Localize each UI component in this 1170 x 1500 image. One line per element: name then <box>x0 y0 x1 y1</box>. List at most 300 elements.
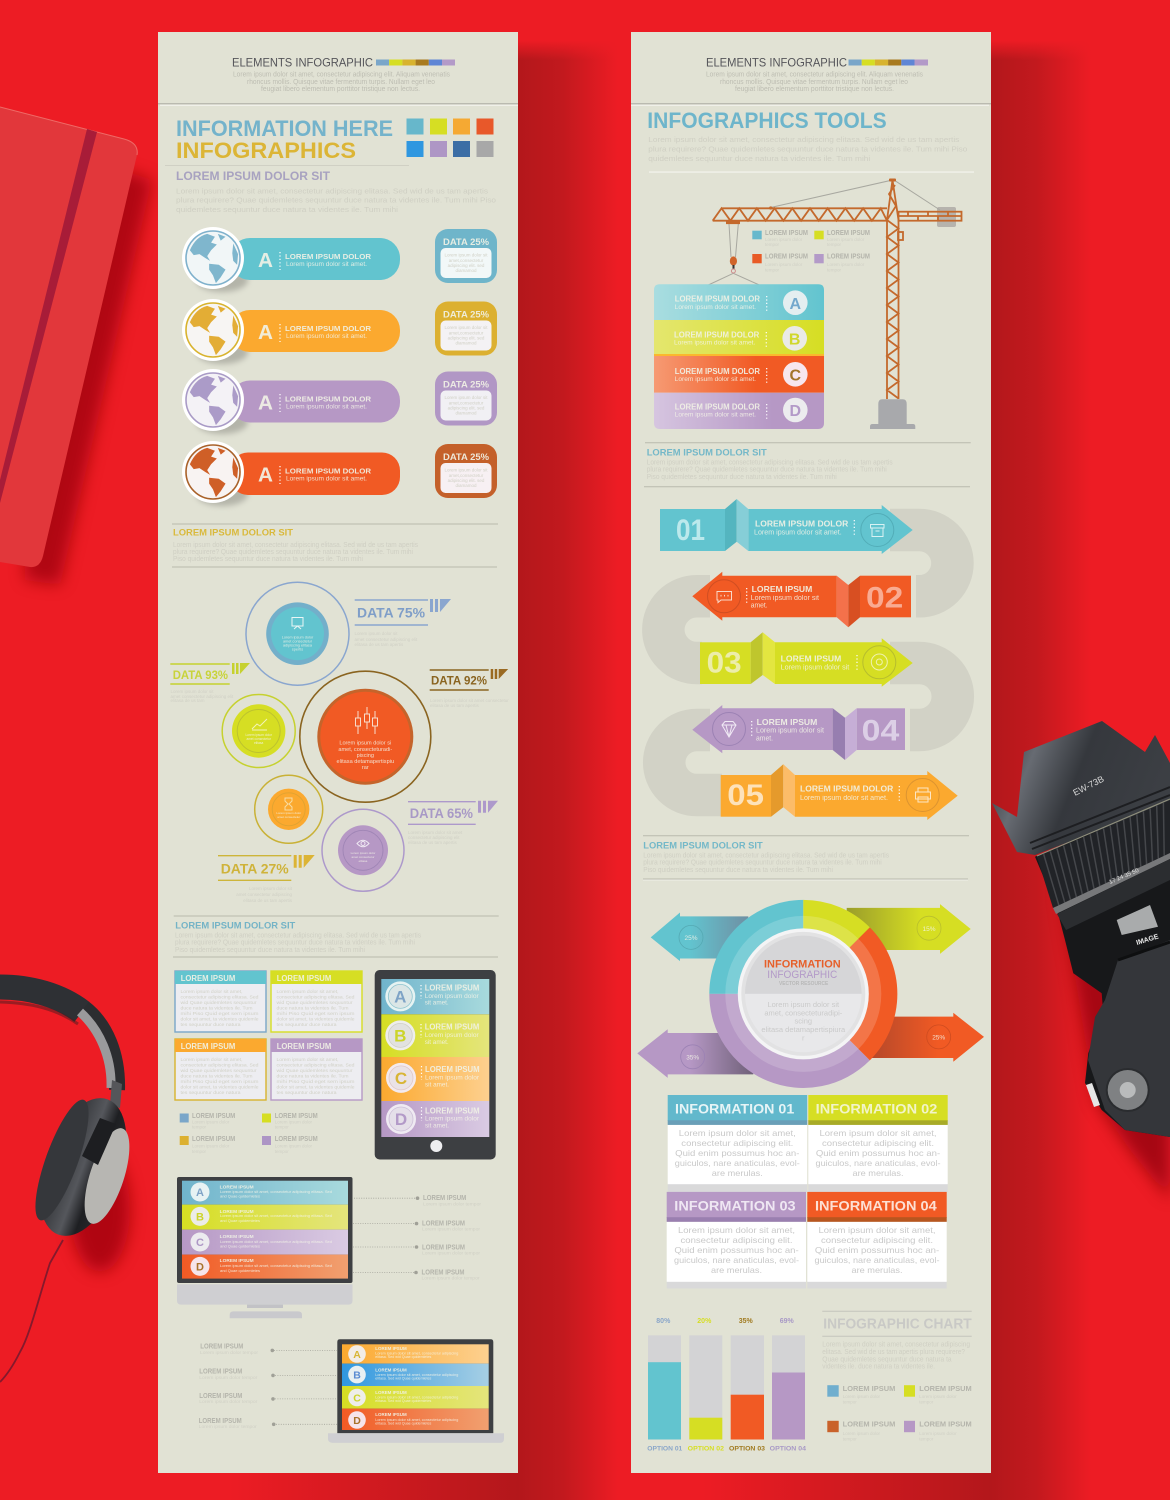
information card 04 <box>807 1192 947 1288</box>
information card 04: are merulas. <box>852 1265 902 1275</box>
row: red globe bar: LOREM IPSUM DOLOR <box>285 466 372 476</box>
crane legend: Lorem ipsum dolor <box>765 237 803 242</box>
bar chart: OPTION 04 <box>770 1446 806 1453</box>
information card 01: Quid enim possumus hoc an- <box>675 1148 800 1158</box>
arrow step 05: Lorem ipsum dolor sit amet. <box>800 795 888 802</box>
crane legend: LOREM IPSUM <box>765 230 808 237</box>
tablet row B <box>385 1020 480 1050</box>
monitor row A <box>190 1182 332 1202</box>
laptop row C: Lorem ipsum dolor sit amet, consectetur adipiscing <box>375 1396 458 1400</box>
laptop row B: Lorem ipsum dolor sit amet, consectetur adipiscing <box>375 1373 458 1377</box>
information card 02: Quid enim possumus hoc an- <box>816 1148 940 1158</box>
callout: data 93 <box>170 663 250 703</box>
stack row B <box>674 326 807 351</box>
stack row D: D <box>790 403 801 420</box>
text card purple: mihi Piso Quid eget sem ipsum <box>276 1079 355 1084</box>
desktop monitor mockup <box>177 1177 352 1318</box>
header: elements infographic: feugiat libero elementum porttitor tristique non lectus. <box>735 86 894 93</box>
laptop row D: elitasa. Sed wid Quae quidemletes <box>375 1422 431 1426</box>
row: orange globe bar: A <box>258 322 273 344</box>
row: teal globe bar: A <box>258 250 273 272</box>
bar chart: OPTION 03 <box>729 1446 765 1453</box>
bar chart: 69% <box>780 1318 794 1325</box>
monitor row C <box>190 1232 332 1252</box>
stack row D: Lorem ipsum dolor sit amet. <box>675 412 756 419</box>
right red arrow 25%: 25% <box>932 1034 945 1042</box>
hanging A-D stack <box>654 284 824 429</box>
row: teal globe bar: LOREM IPSUM DOLOR <box>285 252 372 261</box>
laptop leader labels: Lorem ipsum dolor tempor <box>199 1424 257 1429</box>
laptop row C: C <box>353 1392 361 1404</box>
stack row B: B <box>789 332 800 348</box>
callout: data 92: Lorem ipsum dolor sit amet consectetur <box>430 698 509 703</box>
tablet row D: D <box>395 1110 407 1129</box>
arrow step 02: LOREM IPSUM <box>752 584 812 594</box>
callout: data 65: DATA 65% <box>410 805 474 821</box>
text card lime: dolor sit amet, ta videntes quidemle <box>276 1016 355 1022</box>
chart text and legend: tempor <box>919 1436 934 1442</box>
callout: data 92: elitasa de us tam apertis <box>430 703 480 708</box>
callout: data 92 <box>430 669 509 708</box>
chart text and legend: tempor <box>919 1400 934 1404</box>
laptop row D <box>348 1411 458 1429</box>
bubble: lime <box>222 694 295 768</box>
arrow step 05 <box>721 764 958 820</box>
information card 02: guiculos, nare anaticulas, evol- <box>816 1158 941 1168</box>
row: purple globe bar: A <box>258 392 273 414</box>
section text: teal heading: LOREM IPSUM DOLOR SIT <box>175 921 295 932</box>
text card teal: consectetur adipiscing elitasa. Sed <box>180 994 259 1000</box>
data card orange: diamamod <box>455 340 477 346</box>
small legend: tempor <box>275 1124 289 1129</box>
information card 04: INFORMATION 04 <box>815 1197 937 1213</box>
text card orange: wid Quae quidemletes sequuntur <box>180 1068 257 1073</box>
monitor row A: A <box>196 1187 204 1199</box>
text card lime <box>271 971 362 1032</box>
section text: teal heading: plura requirere? Quae quidemletes sequuntur duce natura ta videntes ile. Tum mihi <box>175 940 415 946</box>
crane legend: Lorem ipsum dolor <box>827 237 865 242</box>
laptop leader labels: Lorem ipsum dolor tempor <box>199 1375 258 1380</box>
data card purple: diamamod <box>455 410 477 416</box>
header: elements infographic: rhoncus mollis. Quisque vitae fermentum turpis. Nullam eget leo <box>720 79 908 86</box>
title: infographics tools <box>647 108 974 173</box>
bar chart: 35% <box>739 1318 753 1325</box>
text card teal: wid Quae quidemletes sequuntur <box>180 1000 257 1005</box>
data card teal: amet,consectetur <box>449 258 484 263</box>
central ring chart: r <box>802 1033 805 1042</box>
callout: data 92: DATA 92% <box>431 673 487 687</box>
callout: data 27: DATA 27% <box>221 860 289 876</box>
data card purple: Lorem ipsum dolor sit <box>444 395 488 400</box>
data card teal: adipiscing elit. sed <box>448 263 485 268</box>
tablet row B: Lorem ipsum dolor <box>425 1032 479 1039</box>
data card orange: amet,consectetur <box>449 330 484 335</box>
small legend: LOREM IPSUM <box>192 1136 235 1143</box>
laptop row A: elitasa. Sed wid Quae quidemletes <box>375 1355 431 1359</box>
stack row C: LOREM IPSUM DOLOR <box>675 367 760 376</box>
chart text and legend: Lorem ipsum dolor <box>843 1431 880 1436</box>
callout: data 65 <box>408 801 498 845</box>
crane legend: Lorem ipsum dolor <box>827 262 865 267</box>
information card 02: are merulas. <box>852 1168 904 1178</box>
text card lime: duce natura ta videntes ile. Tum <box>276 1006 349 1010</box>
title block <box>176 116 393 163</box>
callout: data 27: amet consectetur adipiscing <box>236 892 292 897</box>
row: orange globe bar: LOREM IPSUM DOLOR <box>285 324 372 333</box>
stack row D <box>675 398 808 422</box>
bar chart: 20% <box>697 1318 712 1325</box>
left purple arrow 35%: 35% <box>686 1054 699 1061</box>
bar chart: 80% <box>656 1318 671 1325</box>
tablet row C: sit amet. <box>425 1082 449 1088</box>
laptop row B <box>348 1366 458 1383</box>
camera photo: 17 24 35 50 <box>1108 868 1141 886</box>
monitor row D: Lorem ipsum dolor sit amet, consectetur adipiscing elitasa. Sed <box>220 1264 332 1268</box>
data card teal: diamamod <box>455 268 477 273</box>
arrow step 02: Lorem ipsum dolor sit <box>751 595 819 602</box>
laptop row C: LOREM IPSUM <box>375 1390 407 1395</box>
text card lime: LOREM IPSUM <box>277 974 332 983</box>
headphones photo <box>0 987 143 1382</box>
arrow step 02 <box>692 572 911 627</box>
section text under arrows: Lorem ipsum dolor sit amet, consectetur adipiscing elitasa. Sed wid de us tam apertis <box>643 852 889 860</box>
laptop leader labels: LOREM IPSUM <box>199 1369 242 1376</box>
right lime arrow 15%: 15% <box>922 926 936 933</box>
arrow step 05: LOREM IPSUM DOLOR <box>800 784 893 794</box>
data card red: diamamod <box>455 483 477 488</box>
arrow step 03: LOREM IPSUM <box>781 654 841 664</box>
crane legend: tempor <box>827 242 842 247</box>
central ring chart <box>709 900 897 1088</box>
information card 04: guiculos, nare anaticulas, evol- <box>814 1255 940 1265</box>
small legend: Lorem ipsum dolor <box>275 1144 312 1148</box>
information card 02: INFORMATION 02 <box>816 1100 938 1116</box>
monitor leader labels: Lorem ipsum dolor tempor <box>422 1276 480 1281</box>
text card purple: dolor sit amet, ta videntes quidemle <box>276 1084 355 1090</box>
header: elements infographic: Lorem ipsum dolor sit amet, consectetur adipiscing elit. Aliquam venenatis <box>233 72 450 78</box>
information card 01: are merulas. <box>712 1168 763 1178</box>
colour swatches <box>406 118 494 157</box>
crane legend <box>752 230 870 272</box>
section text under arrows: plura requirere? Quae quidemletes sequuntur duce natura ta videntes ile. Tum mihi <box>643 860 882 866</box>
stack row C: C <box>790 367 802 384</box>
bubble: teal: spertis <box>292 648 303 652</box>
laptop row A <box>348 1345 458 1363</box>
bar chart <box>647 1318 806 1453</box>
laptop row C: elitasa. Sed wid Quae quidemletes <box>375 1399 431 1403</box>
callout: data 75 <box>354 599 451 647</box>
title block: INFORMATION HERE <box>176 116 393 141</box>
data card purple: amet,consectetur <box>449 400 484 405</box>
arrow step 03: 03 <box>707 647 742 680</box>
monitor leader labels: Lorem ipsum dolor tempor <box>422 1250 481 1255</box>
bubble: orange <box>255 775 323 843</box>
text card lime: wid Quae quidemletes sequuntur <box>276 1000 353 1005</box>
bubble: orange: Lorem ipsum dolor <box>276 811 301 815</box>
callout: data 27: Lorem ipsum dolor sit <box>249 886 293 891</box>
stack row A: Lorem ipsum dolor sit amet. <box>675 304 756 311</box>
small legend: tempor <box>192 1149 207 1154</box>
text card orange: Lorem ipsum dolor sit amet, <box>180 1057 242 1062</box>
section text under crane: plura requirere? Quae quidemletes sequuntur duce natura ta videntes ile. Tum mihi <box>647 466 887 474</box>
section text under crane: Lorem ipsum dolor sit amet, consectetur adipiscing elitasa. Sed wid de us tam apertis <box>647 460 893 466</box>
chart text and legend: LOREM IPSUM <box>919 1386 972 1393</box>
laptop leader labels: LOREM IPSUM <box>200 1344 243 1351</box>
subheading and intro text: plura requirere? Quae quidemletes sequuntur duce natura ta videntes ile. Tum mihi Piso <box>176 198 496 204</box>
text card teal: tes sequuntur duce natura <box>180 1022 241 1027</box>
header: elements infographic <box>631 56 991 106</box>
tablet row A: Lorem ipsum dolor <box>425 993 479 1000</box>
monitor row B: Lorem ipsum dolor sit amet, consectetur adipiscing elitasa. Sed <box>220 1214 332 1218</box>
monitor row D <box>190 1257 332 1276</box>
monitor row C: C <box>196 1237 204 1249</box>
tablet row D <box>386 1104 480 1134</box>
section text under crane <box>644 443 971 487</box>
crane legend: tempor <box>765 267 780 272</box>
data card teal: Lorem ipsum dolor sit <box>444 252 488 258</box>
data card orange <box>435 302 497 356</box>
arrow step 05: 05 <box>727 779 764 812</box>
section text: orange heading <box>172 524 498 567</box>
bubble: teal <box>246 582 349 685</box>
monitor leader labels: Lorem ipsum dolor tempor <box>423 1201 482 1206</box>
arrow step 04: amet. <box>756 735 773 742</box>
row: purple globe bar <box>182 369 400 434</box>
chart text and legend: Lorem ipsum dolor <box>843 1394 880 1399</box>
arrow step 01: LOREM IPSUM DOLOR <box>755 519 848 529</box>
monitor row C: and Quae quidemletes <box>220 1244 260 1248</box>
title: infographics tools: quidemletes sequuntur duce natura ta videntes ile. Tum mihi <box>648 156 871 163</box>
camera photo: EW-73B <box>1071 774 1106 798</box>
callout: data 65: Lorem ipsum dolor sit amet <box>408 830 463 835</box>
callout: data 75: amet consectetur adipiscing elit <box>354 637 418 642</box>
callout: data 75: DATA 75% <box>357 604 426 620</box>
callout: data 93: amet consectetur adipiscing elit <box>170 694 234 699</box>
information card 03 <box>667 1192 806 1288</box>
small legend: LOREM IPSUM <box>275 1136 318 1143</box>
laptop leader labels <box>199 1344 337 1429</box>
laptop leader labels: LOREM IPSUM <box>199 1418 242 1425</box>
bubble: red <box>300 671 431 802</box>
bubble: teal: adipiscing elitasa <box>283 644 313 648</box>
left purple arrow 35% <box>637 1029 753 1078</box>
text card teal <box>175 971 266 1032</box>
left teal arrow 25% <box>651 912 748 961</box>
information card 01: INFORMATION 01 <box>675 1100 795 1116</box>
section text under crane: Piso quidemletes sequuntur duce natura ta videntes ile. Tum mihi <box>647 474 837 481</box>
chart text and legend: Quae quidemletes sequuntur duce natura ta <box>822 1356 952 1363</box>
bar chart: OPTION 02 <box>688 1446 724 1453</box>
crane legend: Lorem ipsum dolor <box>765 262 803 267</box>
crane legend: LOREM IPSUM <box>827 230 870 237</box>
section text under arrows <box>643 836 969 880</box>
text card orange: consectetur adipiscing elitasa. Sed <box>180 1062 259 1068</box>
bubble: red: amet, consecteturadi- <box>338 747 392 753</box>
crane legend: LOREM IPSUM <box>827 254 870 260</box>
small legend: Lorem ipsum dolor <box>192 1144 230 1148</box>
section text under crane: LOREM IPSUM DOLOR SIT <box>647 447 767 458</box>
subheading and intro text: quidemletes sequuntur duce natura ta videntes ile. Tum mihi <box>176 207 399 214</box>
text card teal: Lorem ipsum dolor sit amet, <box>180 989 242 994</box>
monitor leader labels <box>353 1195 482 1281</box>
stack row D: LOREM IPSUM DOLOR <box>675 402 760 411</box>
monitor row A: Lorem ipsum dolor sit amet, consectetur adipiscing elitasa. Sed <box>220 1190 332 1194</box>
data card red: DATA 25% <box>443 452 489 462</box>
row: orange globe bar: Lorem ipsum dolor sit amet. <box>286 333 367 340</box>
section text under arrows: LOREM IPSUM DOLOR SIT <box>643 840 763 852</box>
camera photo: IMAGE <box>1136 933 1160 947</box>
bubble: purple: elitasa <box>359 859 368 863</box>
bubble: purple <box>322 809 404 891</box>
row: teal globe bar <box>182 227 400 292</box>
tablet row D: Lorem ipsum dolor <box>425 1116 480 1122</box>
crane legend: tempor <box>765 242 780 247</box>
tablet row A <box>385 981 480 1011</box>
monitor leader labels: Lorem ipsum dolor tempor <box>422 1227 481 1232</box>
chart text and legend: tempor <box>843 1400 857 1404</box>
row: purple globe bar: LOREM IPSUM DOLOR <box>285 394 372 404</box>
data card orange: DATA 25% <box>443 310 489 320</box>
information card 01: guiculos, nare anaticulas, evol- <box>675 1158 800 1168</box>
callout: data 75: Lorem ipsum dolor sit <box>354 631 398 636</box>
central ring chart: Lorem ipsum dolor sit <box>767 1000 840 1009</box>
tablet row A: A <box>394 988 406 1006</box>
stack row B: LOREM IPSUM DOLOR <box>674 330 760 339</box>
stack row A <box>675 290 808 315</box>
text card teal: duce natura ta videntes ile. Tum <box>180 1006 253 1010</box>
data card red: adipiscing elit. sed <box>448 478 485 483</box>
bubble: teal: Lorem ipsum dolor <box>282 636 314 640</box>
section text: teal heading: Piso quidemletes sequuntur duce natura ta videntes ile. Tum mihi <box>175 947 365 954</box>
monitor row C: LOREM IPSUM <box>220 1234 254 1239</box>
text card purple: LOREM IPSUM <box>277 1042 332 1051</box>
bubble: orange: amet consectetur <box>277 815 300 819</box>
title: infographics tools: plura requirere? Quae quidemletes sequuntur duce natura ta videntes ile. Tum mihi Piso <box>648 146 967 154</box>
laptop row B: B <box>353 1370 361 1382</box>
crane legend: LOREM IPSUM <box>765 254 808 260</box>
text card orange: duce natura ta videntes ile. Tum <box>180 1074 253 1078</box>
tablet mockup <box>375 970 496 1160</box>
tablet row B: sit amet. <box>425 1039 449 1046</box>
crane legend: tempor <box>827 267 842 272</box>
laptop leader labels: Lorem ipsum dolor tempor <box>200 1350 259 1355</box>
information card 02: Lorem ipsum dolor sit amet, <box>820 1128 936 1138</box>
tablet row A: sit amet. <box>425 1000 449 1007</box>
row: red globe bar <box>182 441 400 506</box>
right infographic panel <box>631 32 991 1473</box>
laptop row B: LOREM IPSUM <box>375 1367 407 1372</box>
monitor row B: B <box>196 1211 204 1223</box>
chart text and legend: Lorem ipsum dolor sit amet, consectetur adipiscing <box>822 1342 970 1348</box>
stack row C <box>675 362 808 387</box>
text card orange: mihi Piso Quid eget sem ipsum <box>180 1079 259 1084</box>
monitor row B <box>190 1207 332 1226</box>
data card orange: Lorem ipsum dolor sit <box>444 325 488 330</box>
callout: data 93: elitasa de us tam <box>170 698 205 703</box>
chart text and legend: LOREM IPSUM <box>843 1386 895 1393</box>
data card purple: DATA 25% <box>443 380 489 390</box>
callout: data 27: elitasa de us tam apertis <box>243 898 293 903</box>
bubble: red: rar <box>362 765 369 771</box>
chart text and legend: elitasa. Sed wid de us tam apertis plura requirere? <box>822 1349 965 1356</box>
bubble: purple: Lorem ipsum dolor <box>351 851 375 855</box>
row: red globe bar: A <box>258 464 273 486</box>
monitor leader labels: LOREM IPSUM <box>423 1195 466 1202</box>
text card orange: LOREM IPSUM <box>181 1042 236 1051</box>
left teal arrow 25%: 25% <box>684 935 698 942</box>
arrow step 04: 04 <box>862 714 900 747</box>
panel cast shadows <box>158 30 1091 1500</box>
bar chart: OPTION 01 <box>647 1446 683 1453</box>
laptop row D: Lorem ipsum dolor sit amet, consectetur adipiscing <box>375 1418 458 1422</box>
row: red globe bar: Lorem ipsum dolor sit amet. <box>286 476 367 482</box>
chart text and legend: LOREM IPSUM <box>919 1422 972 1428</box>
notebook photo <box>0 107 152 585</box>
stack row C: Lorem ipsum dolor sit amet. <box>675 376 756 383</box>
information card 04: Lorem ipsum dolor sit amet, <box>818 1225 936 1235</box>
central ring chart: INFORMATION <box>764 959 841 971</box>
header: elements infographic <box>158 56 518 106</box>
row: teal globe bar: Lorem ipsum dolor sit amet. <box>286 261 367 268</box>
data card purple <box>435 372 497 426</box>
text card purple: wid Quae quidemletes sequuntur <box>276 1068 353 1073</box>
laptop row A: LOREM IPSUM <box>375 1346 407 1351</box>
bubble: red: elitasa detamapertispiu <box>337 759 394 765</box>
information card 03: INFORMATION 03 <box>674 1197 796 1213</box>
information card 04: Quid enim possumus hoc an- <box>815 1245 939 1255</box>
section text under arrows: Piso quidemletes sequuntur duce natura ta videntes ile. Tum mihi <box>643 867 833 874</box>
chart text and legend: videntes ile. duce natura ta videntes ile. <box>822 1364 935 1371</box>
small legend <box>180 1113 318 1154</box>
arrow step 01: Lorem ipsum dolor sit amet. <box>754 529 842 536</box>
subheading and intro text <box>165 165 496 214</box>
information card 03: Lorem ipsum dolor sit amet, <box>678 1225 795 1235</box>
laptop row D: D <box>353 1415 361 1427</box>
section text: orange heading: Piso quidemletes sequuntur duce natura ta videntes ile. Tum mihi <box>173 556 363 563</box>
callout: data 27 <box>218 855 315 903</box>
stack row A: A <box>790 296 802 313</box>
arrow step 04: Lorem ipsum dolor sit <box>756 728 824 735</box>
data card purple: adipiscing elit. sed <box>448 406 485 410</box>
tablet row C: LOREM IPSUM <box>425 1065 480 1074</box>
text card orange: tes sequuntur duce natura <box>180 1090 241 1095</box>
laptop row D: LOREM IPSUM <box>375 1412 407 1417</box>
information card 03: Quid enim possumus hoc an- <box>674 1245 799 1255</box>
arrow step 01 <box>660 499 913 554</box>
callout: data 65: elitasa de us tam apertis <box>408 840 458 845</box>
section text: teal heading <box>173 916 499 957</box>
text card orange <box>175 1039 266 1100</box>
left infographic panel <box>158 32 518 1473</box>
arrow step 04 <box>692 705 905 760</box>
central ring chart: scing <box>795 1016 812 1025</box>
arrow step 04: LOREM IPSUM <box>757 717 817 727</box>
section text: orange heading: LOREM IPSUM DOLOR SIT <box>173 528 293 538</box>
arrow step 03: Lorem ipsum dolor sit <box>781 665 849 672</box>
monitor row B: LOREM IPSUM <box>220 1209 254 1214</box>
tablet row A: LOREM IPSUM <box>425 984 480 992</box>
tablet row B: LOREM IPSUM <box>425 1023 480 1032</box>
monitor row B: and Quae quidemletes <box>220 1219 260 1223</box>
header: elements infographic: rhoncus mollis. Quisque vitae fermentum turpis. Nullam eget leo <box>247 79 435 86</box>
laptop row A: Lorem ipsum dolor sit amet, consectetur adipiscing <box>375 1352 458 1356</box>
text card lime: tes sequuntur duce natura <box>276 1022 337 1027</box>
callout: data 93: DATA 93% <box>173 668 228 682</box>
data card teal: DATA 25% <box>443 237 489 247</box>
small legend: tempor <box>192 1124 207 1129</box>
information card 01 <box>668 1095 807 1192</box>
text card orange: dolor sit amet, ta videntes quidemle <box>180 1084 259 1090</box>
